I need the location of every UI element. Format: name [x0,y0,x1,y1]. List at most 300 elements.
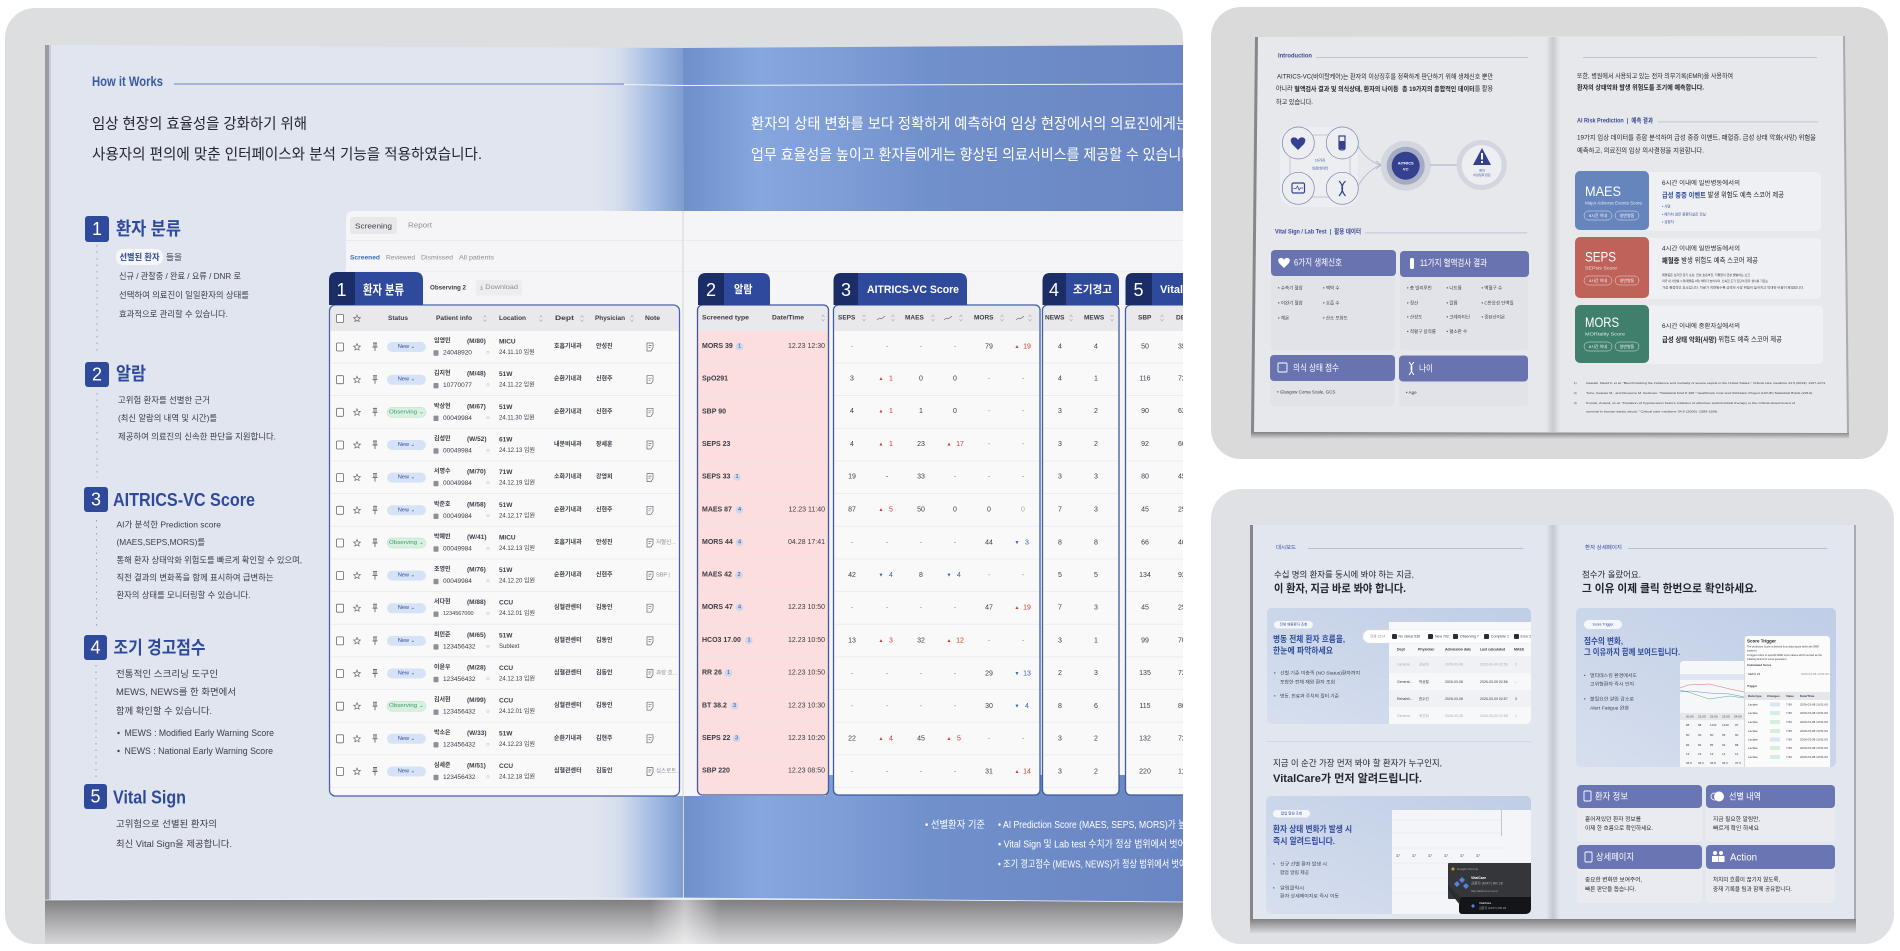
score values: 1 [889,408,893,415]
row 7: 24.12.13 입원 [499,544,535,552]
panel: dashboard and detail brochure [1211,489,1894,944]
alarm rows: 4 [738,540,741,546]
faded patient table: 한수진 [1419,696,1429,701]
alarm rows: SEPS 22 [702,735,731,742]
VitalCare headline [1273,758,1442,785]
alert circle: 환자 [1479,168,1485,172]
row 7: 저혈신... [656,538,676,546]
popup alert card: • [1273,862,1275,866]
filter pill: Complete 1 [1491,634,1509,638]
row 4: 24.12.13 입원 [499,446,535,454]
table header row: Note [645,315,660,322]
score values: - [851,540,854,546]
alarm rows: 1 [747,638,751,644]
row 12 [336,696,653,716]
vital values: 35 [1178,344,1186,350]
card: 11 lab results: • 나트륨 [1446,284,1462,292]
score values: 5 [889,506,893,514]
row 4: 내분비내과 [554,440,582,448]
table header row: Dept [555,315,575,322]
row 14: 심세준 [434,761,451,769]
score trigger card: Alert Fatigue 완화 [1590,704,1629,712]
popup alert card: 알림클릭시 [1280,884,1304,892]
faded patient table: Admission date [1445,648,1471,652]
news mews header and values: 3 [1094,506,1098,514]
score values: - [954,344,957,350]
row 3: 51W [499,404,513,411]
popup alert card: 환자 상세페이지로 즉시 이동 [1280,892,1339,900]
dashboard card: 포함한 전체 재원 환자 조회 [1280,678,1335,686]
row 12: (M/99) [467,697,486,704]
section 1: patient classification: 선택하여 의료진이 일일환자의 상태를 [119,290,249,300]
news mews header and values: 4 [1094,344,1098,350]
score values: 12 [956,638,964,644]
alarm rows: 12.23 12:30 [788,343,825,350]
trend chart panel: 36.6 [1722,761,1728,765]
score card: SEPS [1575,237,1821,299]
card: patient info [1577,785,1702,842]
score values: ▼ [1015,704,1019,710]
faded patient table: 3 [1515,662,1517,666]
score trigger panel: 7.89 [1786,746,1792,750]
section 1: patient classification: 들을 [166,252,182,262]
vital values: 72 [1178,670,1186,677]
score values: 31 [985,768,993,776]
alarm rows: MORS 47 [702,604,733,611]
news mews header and values: 7 [1058,604,1062,612]
tab: 2 알람: 2 [706,280,716,300]
section 5: Vital Sign: 최신 Vital Sign을 제공합니다. [116,839,232,849]
score trigger panel: 7.89 [1786,738,1792,742]
row 8: 24.12.20 입원 [499,577,535,585]
left page header: How it Works: How it Works [92,73,163,89]
row 4 [336,434,653,454]
trend chart panel: 1240 [1722,723,1729,727]
row 12: 김동인 [596,701,613,709]
score values: ▲ [947,736,951,742]
alarm rows: SEPS 23 [702,441,731,448]
section 2: alarm: (최신 알람의 내역 및 시간)를 [118,413,217,423]
trend chart panel: 36.8 [1710,761,1716,765]
row 1: 안성진 [596,342,613,350]
row 13: 24.12.23 입원 [499,740,535,748]
news mews header and values: 4 [1058,344,1062,350]
row 11: (M/28) [467,664,486,672]
references [1574,381,1826,414]
score card: MORS: MORtality Score [1585,332,1626,336]
row 2: 순환기내과 [554,375,582,383]
news mews header and values: 2 [1058,670,1062,677]
row 6: 51W [499,502,513,509]
row 12: CCU [499,698,513,705]
alarm rows: 04.28 17:41 [788,539,825,546]
score card: SEPS: SEPS [1585,248,1616,264]
row 4: 김성민 [434,434,451,442]
row 7: 00049984 [443,546,472,552]
section 1: patient classification: 선별된 환자 [120,252,160,262]
card: detail page: 중요한 변화만 보여주어, [1585,876,1642,884]
vital values: 116 [1139,376,1151,382]
score trigger panel: Lactate [1748,746,1758,750]
score card: MORS: 급성 상태 악화(사망) 위험도 예측 스코어 제공 [1662,334,1783,344]
chart grid and values: 37 [1444,854,1448,858]
row 2: 51W [499,371,513,378]
score trigger panel [1744,636,1832,767]
row 5: (M/70) [467,469,486,476]
score trigger panel: Lactate [1748,755,1758,759]
row 3: 신현주 [596,407,613,415]
filter pill: New 702 [1435,634,1449,638]
score header [838,314,1032,322]
score values: - [954,670,957,678]
vital values: 62 [1178,408,1186,415]
faded patient table: Dept [1397,648,1406,652]
card: 6 vital signs: • 체온 [1278,314,1289,322]
score values: ▲ [1015,605,1019,611]
row 12: 심혈관센터 [554,701,582,709]
row 8: 51W [499,567,513,574]
references: Torio, Celeste M., and Roxanne M. Andrews. "Statistical brief # 160." Healthcare Cost and Utilization Project (HCUP) Statistical Briefs (2013). [1586,391,1813,395]
score values: 29 [985,670,993,678]
right page footnotes: • 선별환자 기준 [925,819,985,831]
score trigger panel: Lactate [1748,720,1758,724]
score values: 32 [917,638,925,644]
vital sign heading: Vital Sign / Lab Test | 활용 데이터 [1275,226,1361,236]
faded patient table: General... [1397,662,1412,666]
score values: - [886,474,889,480]
score card: MORS [1575,305,1823,364]
card: age: 나이 [1419,364,1433,374]
alarm rows: 4 [738,604,741,610]
faded patient table: - [1515,680,1517,684]
card: screening history [1706,785,1835,842]
score values: ▼ [879,572,883,578]
trend chart panel: 92 [1722,743,1726,747]
score values: 4 [957,572,961,579]
tab: 4 조기경고: 조기경고 [1073,282,1112,296]
dashboard screenshot background with tabs: Report [408,222,432,230]
score card: SEPS: 가장 결정적인 요소입니다. 치료가 지연될수록 급격히 사망 위험이 높아지고 막대한 비용이 발생합니다. [1662,284,1804,290]
row 11: CCU [499,665,513,672]
score trigger panel: Lactate [1748,702,1758,706]
row 14: 김동인 [596,766,613,774]
score trigger panel: initiating factors for score generation. [1747,657,1787,661]
score values: 1 [919,408,923,415]
vital values: 72 [1178,376,1186,382]
row 3: (M/67) [467,403,486,410]
VitalCare headline: 지금 이 순간 가장 먼저 봐야 할 환자가 누구인지, [1273,758,1442,768]
score values: 1 [889,441,893,448]
dashboard card: 한눈에 파악하세요 [1273,646,1333,656]
score values: - [886,604,889,612]
vital values: DBP [1176,314,1190,322]
diagram: data inputs to AITRICS-VC to alert [1280,127,1507,207]
vital values: 66 [1141,540,1149,546]
row 8: 순환기내과 [554,571,582,579]
vital values: 25 [1178,506,1186,514]
section 3: AITRICS-VC Score: 3 [91,490,101,510]
score values: ▼ [1015,671,1019,677]
card: detail page [1577,845,1702,903]
row 7: ○ [486,546,490,552]
alarm rows: 4 [738,507,741,513]
row 6: ○ [486,513,490,519]
tab: 2 알람 [698,273,770,305]
dashboard card: 병동, 진료과 주치의 필터 기준 [1280,692,1339,700]
left page headline: 임상 현장의 효율성을 강화하기 위해 [92,116,307,132]
score card: MAES: MAES [1585,183,1621,199]
faded patient table: 1 [1515,714,1517,718]
row 9: 1234567000 [443,611,474,617]
AI Risk Prediction heading: 예측하고, 의료진의 임상 의사결정을 지원합니다. [1577,146,1704,154]
tab: 2 알람: 알람 [734,282,752,296]
right page footnotes: • Vital Sign 및 Lab test 수치가 정상 범위에서 벗어난 [998,838,1194,850]
score values: - [1022,638,1025,644]
score values: 19 [1023,344,1031,350]
news mews header and values: 3 [1058,408,1062,415]
AITRICS-VC core: AITRICS [1398,160,1414,166]
vital values: 25 [1178,604,1186,612]
tab: 3 AITRICS-VC Score: 3 [841,280,851,300]
gaps between table panels: blue band start [826,775,1183,796]
alert circle: 이상징후 판단 [1473,172,1491,177]
row 10: 심혈관센터 [554,636,582,644]
score trigger card: • [1584,696,1586,702]
score card: SEPS: 미국 내 사망률 4 위(패혈증 3위) 해마다 늘어나며, 신속한 조기 진단이 환자 생사를 가르는 [1662,278,1768,283]
faded patient table [1389,648,1531,718]
score values: - [851,703,854,710]
trend chart panel: 36.6 [1686,761,1692,765]
row 8: (M/76) [467,567,486,574]
card: patient info: 환자 정보 [1595,790,1628,802]
notification popup: 김환자 (M/47) RR 28 [1471,880,1503,886]
vital values: 45 [1141,604,1149,612]
score trigger card: 점수의 변화, [1584,636,1623,646]
score values: 87 [848,506,856,514]
score header: MORS [974,314,994,322]
table header row: Physician [595,315,625,322]
trend chart panel: 60 [1698,733,1702,737]
section 2: alarm: 알람 [116,364,146,384]
filter pill: No status 536 [1398,634,1420,638]
score values: ▲ [879,507,883,513]
trend chart panel: 36.6 [1698,761,1704,765]
dashboard page heading: 대시보드 [1276,544,1296,551]
score values: - [920,768,923,776]
section 3: AITRICS-VC Score [84,487,302,630]
score values: 19 [1023,604,1031,612]
score trigger panel: Lactate [1748,729,1758,733]
score values: - [851,604,854,612]
row 13: 김현주 [596,734,613,742]
score values: 0 [919,376,923,382]
row 12: Observing ⌄ [389,703,424,709]
row 13: 123456432 [443,741,476,748]
trend chart panel: 1133 [1710,723,1717,727]
alarm rows: 3 [733,703,736,709]
table panel 4: early warning [1042,273,1119,795]
references: survival in human septic shock." Critical care medicine 34.6 (2006): 1589-1596. [1586,410,1718,414]
score values: ▲ [1015,344,1019,350]
dashboard screenshot background with tabs [346,211,1183,796]
card: detail page: 상세페이지 [1596,852,1634,862]
popup alert card: 팝업 알림 제공 [1280,869,1309,876]
tab: 4 조기경고: 4 [1049,280,1059,300]
row 10: 123456432 [443,643,476,650]
score values: - [1022,474,1025,480]
vital values [1138,314,1190,776]
score trigger card: 고위험환자 즉시 인지 [1590,680,1634,688]
row 2: 24.11.22 입원 [499,381,535,389]
trend chart panel: 88 [1686,723,1690,727]
trend chart panel: 60 [1735,733,1739,737]
filter pill: Observing 7 [1460,634,1479,638]
score card: SEPS: 패혈증 발생 위험도 예측 스코어 제공 [1662,256,1758,264]
faded patient table: Physician [1418,648,1434,652]
row 13: ○ [486,742,490,748]
score values: - [851,768,854,776]
score values: - [1022,736,1025,742]
faded patient table: 2026-03-09 02:58 [1480,714,1508,718]
alarm rows: 3 [735,736,738,742]
notification popup: VitalCare [1471,876,1486,880]
score card: MAES: 급성 중증 이벤트 발생 위험도 예측 스코어 제공 [1662,190,1784,199]
score values: - [954,474,957,480]
row 10: ○ [486,644,490,650]
row 4: New ⌄ [398,442,415,448]
section 4: early warning score: 조기 경고점수 [114,638,206,658]
patient detail heading: 점수가 올랐어요. [1582,570,1641,580]
score values: 0 [1021,506,1025,514]
trend chart panel: 37.0 [1735,761,1741,765]
alarm rows: 12.23 10:50 [788,670,825,676]
dashboard card [1267,608,1538,724]
score trigger panel: 7.89 [1786,711,1792,715]
row 14: ○ [486,774,490,780]
table panel 5: vital sign [1124,273,1183,796]
row 3: 박상현 [434,402,451,410]
card: detail page: 빠른 판단을 돕습니다. [1585,885,1636,893]
score values: - [988,441,991,448]
references: 3) [1574,401,1577,405]
score values: 23 [917,441,925,448]
card: 11 lab results: • 산성도 [1407,314,1422,320]
dashboard screenshot background with tabs: ⤓ Download [480,284,518,291]
news mews header and values [1045,314,1114,776]
table header row: Patient info [436,315,472,322]
row 9: CCU [499,600,513,607]
alarm rows: 12.23 10:50 [788,637,825,644]
score trigger panel: SEPS 23 [1748,672,1761,676]
right page text: EMR: 또한, 병원에서 사용되고 있는 전자 의무기록(EMR)을 사용하여 [1577,71,1733,80]
intro heading and paragraph: AITRICS-VC(바이탈케어)는 환자의 이상징후를 정확하게 판단하기 위해 생체신호 뿐만 [1277,72,1493,80]
card: screening history: 지금 필요한 알림만, [1713,815,1760,823]
faded patient table: General... [1397,680,1412,684]
trend chart panel: 20:00 [1686,714,1694,718]
chart grid and values: 37 [1428,854,1432,858]
score values: - [920,703,923,710]
alarm rows: HCO3 17.00 [702,637,741,644]
row 9: 심혈관센터 [554,603,582,611]
score trigger panel: Lactate [1748,738,1758,742]
row 7: (W/41) [467,534,486,541]
chart grid and values: 37 [1476,854,1480,858]
alarm rows: 2 [737,572,741,578]
left page headline [92,116,482,163]
patient detail heading: 환자 상세페이지 [1585,544,1622,551]
row 6: (M/58) [467,501,486,508]
row 12: 24.12.01 입원 [499,707,535,715]
score values: - [988,408,991,415]
score values: ▲ [879,408,883,414]
score trigger panel: 2026-03-08 10:51:00 [1800,729,1828,733]
score trigger panel: 2026-03-08 10:51:00 ⌄ [1801,672,1832,676]
score values: - [988,474,991,480]
section 1: patient classification: 신규 / 관찰중 / 완료 / 요류 / DNR 로 [119,271,241,281]
score values: 22 [848,736,856,742]
row 10: 김동인 [596,636,613,644]
card: 11 lab results: • 칼륨 [1446,300,1458,306]
score values: 13 [848,638,856,644]
faded patient table: MAES [1514,648,1525,652]
score values: 30 [985,703,993,710]
row 8: 신현주 [596,571,613,579]
faded patient table: 2026-03-09 02:56 [1480,680,1508,684]
card: 11 lab results: • 젖산 [1407,300,1418,306]
card: 6 vital signs: • 호흡 수 [1323,300,1340,306]
arrow to alert [1430,163,1461,167]
vital values: 110 [1178,768,1189,776]
card: age: • Age [1406,390,1417,395]
score trigger card: Score Trigger [1592,622,1614,626]
vital values: 45 [1178,474,1186,480]
tab: 5 Vital: Vital Sign [1160,284,1210,296]
news mews header and values: NEWS [1045,314,1065,322]
score card: SEPS: 4시간 이내 [1589,277,1607,283]
vital values: 80 [1141,474,1149,480]
row 11: 김동인 [596,668,613,676]
faded patient table: 2026-03-08 [1445,662,1463,666]
score values: 19 [848,474,856,480]
section 3: AITRICS-VC Score: 통해 환자 상태악화 위험도를 빠르게 확인할 수 있으며, [116,555,302,565]
score trigger panel: 2026-03-08 10:51:00 [1800,738,1828,742]
row 11: 과량 호... [656,668,678,676]
card: 11 lab results: • 적혈구 용적률 [1407,328,1436,335]
vital values: 115 [1139,703,1151,710]
notification popup: http://aitrics-vc.com/ [1471,889,1498,893]
alarm rows: 12.23 08:50 [788,768,825,774]
section 3: AITRICS-VC Score: 환자의 상태를 모니터링할 수 있습니다. [116,590,250,600]
score values: ▼ [947,572,951,578]
score values: - [954,703,957,710]
patient detail heading: 그 이유 이제 클릭 한번으로 확인하세요. [1582,581,1757,595]
news mews header and values: 2 [1094,441,1098,448]
row 1: (M/80) [467,338,486,345]
faded patient table: 박상철 [1419,679,1429,684]
row 8: New ⌄ [398,573,415,579]
trend chart panel: 82 [1698,743,1702,747]
row 11: ○ [486,676,490,682]
row 12: ○ [486,709,490,715]
chart grid and values: 37 [1460,854,1464,858]
score card: MAES: 6시간 이내에 일반병동에서의 [1662,179,1740,187]
trend chart panel: 19 [1710,752,1714,756]
row 2: New ⌄ [398,377,415,383]
row 14: 심스로트.. [656,766,680,774]
row 13: New ⌄ [398,736,415,742]
table panel 2: alarm [698,273,828,795]
faded patient table: 3 [1515,697,1517,701]
